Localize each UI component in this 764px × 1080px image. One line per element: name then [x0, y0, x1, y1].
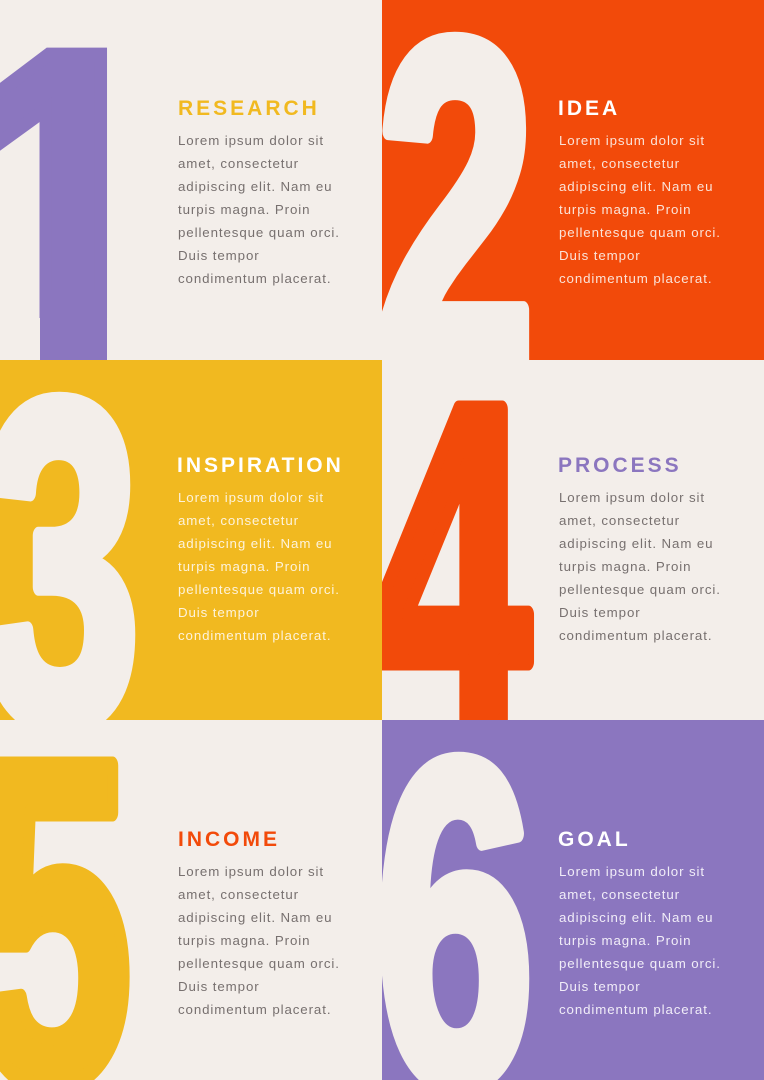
text block: inspiration: pellentesque quam orci. — [178, 582, 340, 597]
text block: research: Duis tempor — [178, 248, 260, 263]
panel: idea — [382, 0, 764, 360]
heading: goal: GOAL — [558, 828, 631, 851]
number 1 — [0, 48, 107, 360]
text block: inspiration: Lorem ipsum dolor sit — [178, 490, 324, 505]
text block: goal: Duis tempor — [559, 979, 641, 994]
text block: income: pellentesque quam orci. — [178, 956, 340, 971]
text block: idea: amet, consectetur — [559, 156, 680, 171]
panel: research — [0, 48, 338, 360]
heading: inspiration: INSPIRATION — [177, 454, 344, 477]
text block: process: turpis magna. Proin — [559, 559, 691, 574]
text block: income: Lorem ipsum dolor sit — [178, 864, 324, 879]
text block: research: turpis magna. Proin — [178, 202, 310, 217]
text block: goal: amet, consectetur — [559, 887, 680, 902]
text block: idea: pellentesque quam orci. — [559, 225, 721, 240]
text block: research: amet, consectetur — [178, 156, 299, 171]
panel: income — [0, 756, 338, 1080]
text block: income: Duis tempor — [178, 979, 260, 994]
text block: process: condimentum placerat. — [559, 628, 712, 643]
text block: income: adipiscing elit. Nam eu — [178, 910, 332, 925]
text block: inspiration: turpis magna. Proin — [178, 559, 310, 574]
panel: process — [382, 400, 719, 720]
text block: process: Lorem ipsum dolor sit — [559, 490, 705, 505]
text block: income: amet, consectetur — [178, 887, 299, 902]
text block: inspiration: Duis tempor — [178, 605, 260, 620]
text block: idea: turpis magna. Proin — [559, 202, 691, 217]
text block: inspiration: adipiscing elit. Nam eu — [178, 536, 332, 551]
text block: idea: Lorem ipsum dolor sit — [559, 133, 705, 148]
text block: goal: pellentesque quam orci. — [559, 956, 721, 971]
text block: goal: Lorem ipsum dolor sit — [559, 864, 705, 879]
heading: process: PROCESS — [558, 454, 682, 477]
text block: inspiration: amet, consectetur — [178, 513, 299, 528]
text block: inspiration: condimentum placerat. — [178, 628, 331, 643]
panel: goal — [382, 720, 764, 1080]
text block: idea: adipiscing elit. Nam eu — [559, 179, 713, 194]
text block: research: condimentum placerat. — [178, 271, 331, 286]
text block: research: adipiscing elit. Nam eu — [178, 179, 332, 194]
text block: goal: condimentum placerat. — [559, 1002, 712, 1017]
text block: goal: adipiscing elit. Nam eu — [559, 910, 713, 925]
text block: idea: Duis tempor — [559, 248, 641, 263]
text block: idea: condimentum placerat. — [559, 271, 712, 286]
text block: research: pellentesque quam orci. — [178, 225, 340, 240]
text block: process: pellentesque quam orci. — [559, 582, 721, 597]
text block: process: adipiscing elit. Nam eu — [559, 536, 713, 551]
text block: income: turpis magna. Proin — [178, 933, 310, 948]
text block: goal: turpis magna. Proin — [559, 933, 691, 948]
heading: income: INCOME — [178, 828, 280, 851]
number 4: 4 — [371, 311, 532, 825]
text block: process: Duis tempor — [559, 605, 641, 620]
heading: research: RESEARCH — [178, 97, 320, 120]
text block: research: Lorem ipsum dolor sit — [178, 133, 324, 148]
heading: idea: IDEA — [558, 97, 620, 120]
text block: income: condimentum placerat. — [178, 1002, 331, 1017]
text block: process: amet, consectetur — [559, 513, 680, 528]
panel: inspiration — [0, 360, 382, 720]
